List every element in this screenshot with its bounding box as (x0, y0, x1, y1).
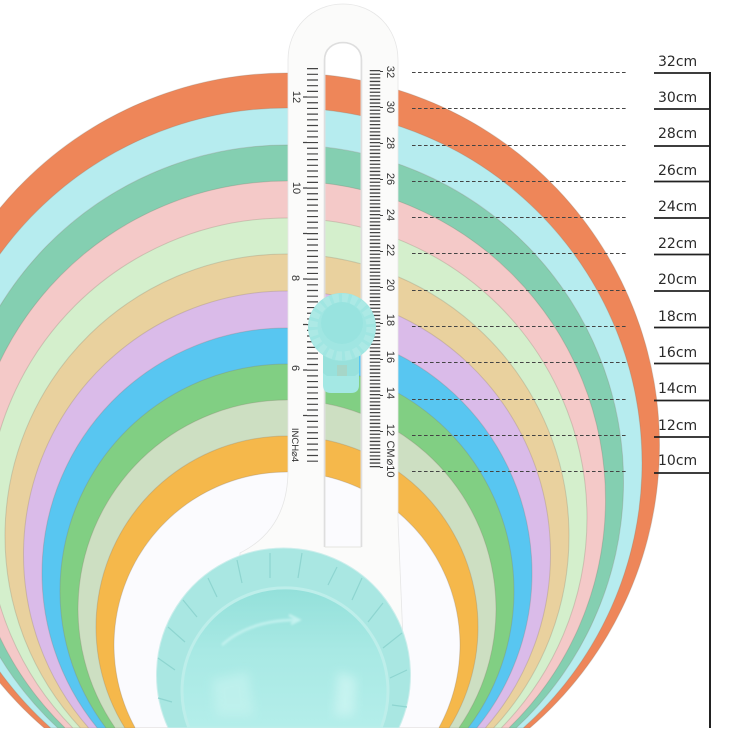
size labels: 22cm (658, 236, 697, 252)
centimetre numbers: 32 (384, 66, 396, 78)
size labels: 26cm (658, 163, 697, 179)
centimetre numbers: 18 (384, 314, 396, 326)
centimetre numbers: 14 (384, 387, 396, 399)
centimetre numbers: 20 (384, 279, 396, 291)
hub highlights (212, 672, 254, 716)
inch numbers: INCH⌀4 (289, 428, 300, 462)
bottom white strip (0, 728, 730, 730)
centimetre numbers: 16 (384, 351, 396, 363)
centimetre numbers: 12 (384, 424, 396, 436)
centimetre numbers: 30 (384, 101, 396, 113)
inch numbers: 8 (289, 275, 301, 281)
inch numbers: 6 (289, 365, 301, 371)
centimetre numbers: 26 (384, 173, 396, 185)
ruler arm (240, 4, 403, 640)
centimetre numbers: 28 (384, 137, 396, 149)
hub ribs (158, 553, 407, 707)
size labels: 16cm (658, 345, 697, 361)
size labels: 18cm (658, 309, 697, 325)
hub arrow (222, 615, 299, 645)
size labels: 10cm (658, 453, 697, 469)
size labels: 30cm (658, 90, 697, 106)
hub bowl (156, 548, 410, 728)
inch numbers: 12 (290, 91, 302, 103)
centimetre numbers (384, 66, 396, 477)
size labels: 32cm (658, 54, 697, 70)
dashed guide lines (412, 72, 627, 472)
centimetre numbers: 24 (384, 209, 396, 221)
slot edge shading (324, 42, 362, 547)
slot bottom edge (325, 546, 361, 548)
hub inner dish (182, 588, 388, 728)
size labels: 24cm (658, 199, 697, 215)
size labels: 14cm (658, 381, 697, 397)
size labels: 28cm (658, 126, 697, 142)
centimetre numbers: ⌀10 (384, 459, 396, 477)
scale bracket (654, 72, 711, 728)
size labels: 12cm (658, 418, 697, 434)
left inch scale (303, 68, 312, 464)
size labels (658, 54, 697, 469)
inch numbers (289, 91, 302, 462)
inch numbers: 10 (290, 182, 302, 194)
centimetre numbers: 22 (384, 244, 396, 256)
slider knob (308, 293, 376, 393)
right centimetre scale (375, 70, 383, 468)
centimetre numbers: CM (384, 440, 396, 458)
size labels: 20cm (658, 272, 697, 288)
